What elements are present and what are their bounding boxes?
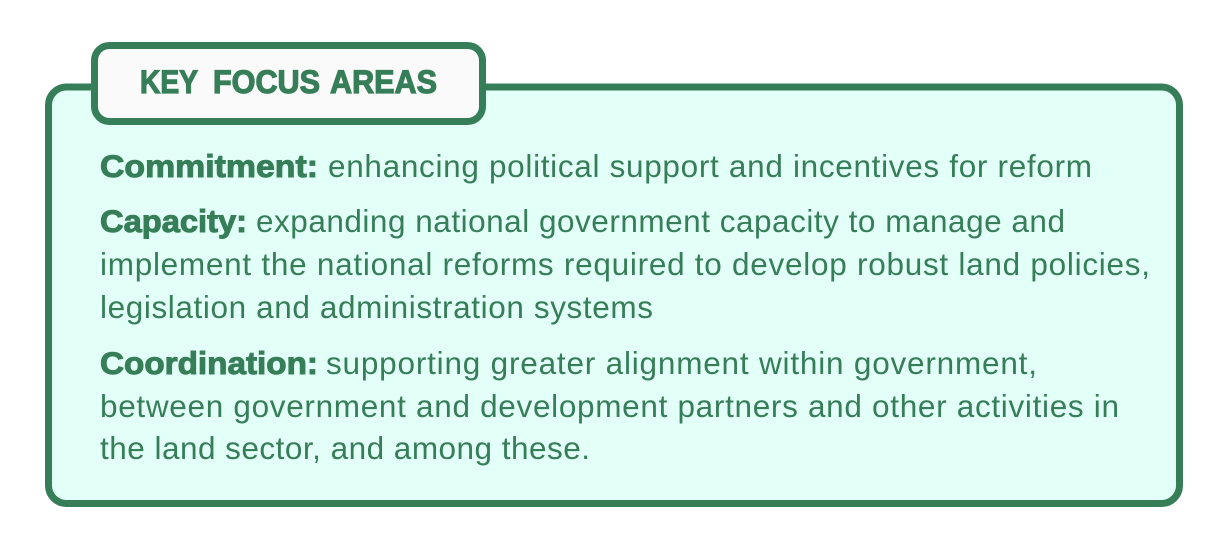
- heading tab: KEY: [140, 64, 198, 100]
- heading tab: AREAS: [330, 64, 437, 100]
- text block: coordination: between government and development partners and other activities in: [100, 388, 1119, 424]
- text block: capacity: implement the national reforms required to develop robust land policies,: [100, 246, 1150, 282]
- text block: capacity: expanding national government capacity to manage and: [256, 203, 1065, 239]
- text block: commitment: Commitment:: [100, 148, 318, 184]
- text block: coordination: [100, 345, 1119, 466]
- heading tab: [94, 46, 482, 122]
- panel: key focus areas: [48, 87, 1180, 504]
- text block: coordination: supporting greater alignment within government,: [326, 345, 1037, 381]
- text block: commitment: enhancing political support and incentives for reform: [328, 148, 1092, 184]
- text block: capacity: legislation and administration systems: [100, 289, 653, 325]
- text block: coordination: the land sector, and among these.: [100, 430, 590, 466]
- text block: capacity: [100, 203, 1150, 325]
- text block: capacity: Capacity:: [100, 203, 247, 239]
- heading tab: FOCUS: [213, 64, 320, 100]
- text block: coordination: Coordination:: [100, 345, 318, 381]
